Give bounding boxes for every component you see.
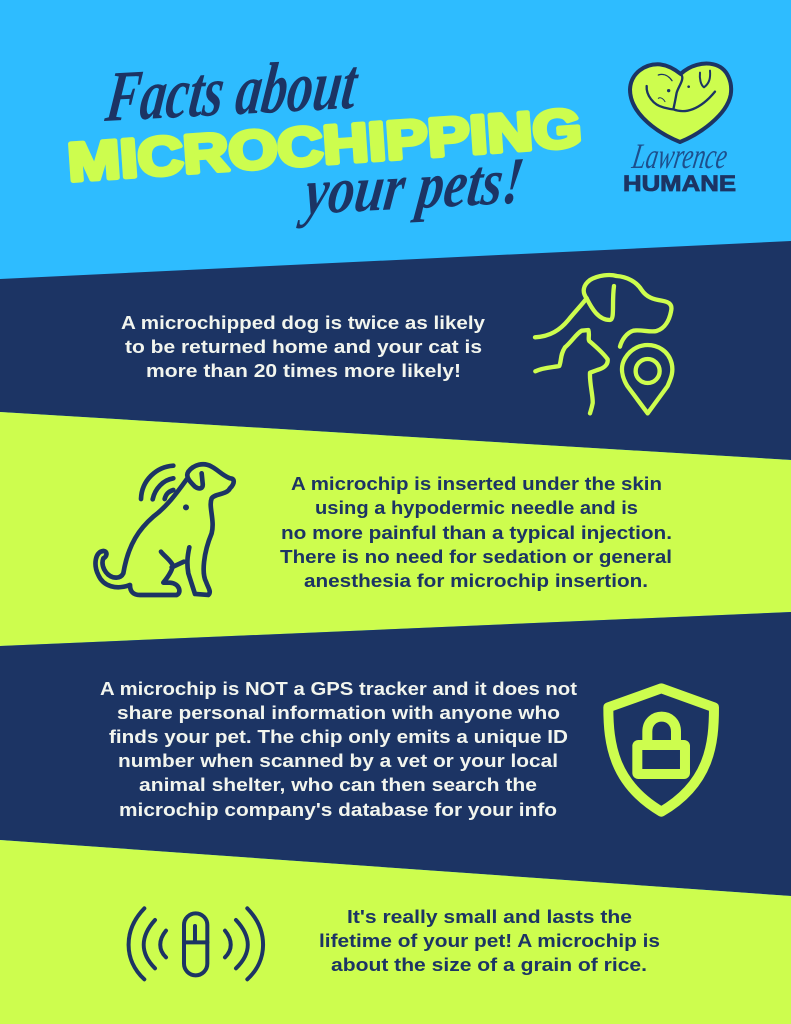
panel 3 text: not a GPS tracker: share personal information with anyone who bbox=[117, 702, 560, 723]
logo wordmark: HUMANE: HUMANE bbox=[623, 171, 736, 196]
panel 2 text: insertion: using a hypodermic needle and is bbox=[315, 497, 638, 518]
title line: your pets!: your pets! bbox=[296, 145, 528, 229]
panel 4 text: size and lifetime: about the size of a grain of rice. bbox=[331, 954, 647, 975]
panel 1 text: return rates: more than 20 times more likely! bbox=[146, 360, 461, 381]
panel 2 text: insertion: A microchip is inserted under the skin bbox=[291, 473, 662, 494]
panel 3 text: not a GPS tracker: microchip company's database for your info bbox=[119, 799, 557, 820]
dog ear bbox=[587, 286, 614, 320]
logo wordmark: Lawrence: Lawrence bbox=[629, 136, 731, 176]
panel 3 text: not a GPS tracker: A microchip is NOT a GPS tracker and it does not bbox=[100, 678, 577, 699]
panel 2 text: insertion: anesthesia for microchip insertion. bbox=[304, 570, 648, 591]
panel 1 text: return rates bbox=[121, 312, 486, 381]
chip dot bbox=[183, 504, 189, 510]
band 1: navy bbox=[0, 241, 791, 460]
dog chest, head and ear bbox=[187, 464, 234, 595]
band 2: lime bbox=[0, 412, 791, 646]
capsule bbox=[184, 913, 207, 975]
dog body and tail bbox=[96, 479, 187, 595]
panel 1 text: return rates: to be returned home and your cat is bbox=[125, 336, 482, 357]
icon: shield with padlock bbox=[608, 688, 714, 812]
panel 3 text: not a GPS tracker: animal shelter, who can then search the bbox=[139, 774, 537, 795]
panel 1 text: return rates: A microchipped dog is twice as likely bbox=[121, 312, 486, 333]
panel 4 text: size and lifetime: It's really small and lasts the bbox=[347, 906, 632, 927]
band 4: lime bbox=[0, 840, 791, 1024]
icon: microchip capsule with signal arcs bbox=[129, 908, 263, 979]
panel 3 text: not a GPS tracker bbox=[100, 678, 577, 820]
panel 2 text: insertion: no more painful than a typical injection. bbox=[281, 522, 672, 543]
title bbox=[66, 43, 584, 229]
signal waves bbox=[141, 466, 173, 499]
logo: Lawrence Humane bbox=[623, 64, 736, 196]
logo heart with cat and dog bbox=[630, 64, 731, 142]
panel 4 text: size and lifetime bbox=[319, 906, 660, 975]
pin centre bbox=[636, 359, 660, 383]
dog outline bbox=[535, 275, 671, 347]
panel 3 text: not a GPS tracker: finds your pet. The chip only emits a unique ID bbox=[109, 726, 568, 747]
icon: dog, cat and location pin bbox=[535, 275, 672, 413]
padlock body bbox=[637, 745, 685, 774]
title line: MICROCHIPPING: MICROCHIPPING bbox=[66, 98, 584, 193]
right arcs bbox=[225, 908, 263, 979]
shield bbox=[608, 688, 714, 812]
panel 3 text: not a GPS tracker: number when scanned by a vet or your local bbox=[118, 750, 558, 771]
padlock shackle bbox=[647, 717, 676, 745]
dog leg divider bbox=[172, 562, 184, 567]
left arcs bbox=[129, 908, 166, 979]
icon: sitting dog with chip signal bbox=[96, 464, 234, 595]
title line: Facts about: Facts about bbox=[101, 43, 363, 137]
location pin bbox=[622, 345, 672, 413]
cat outline bbox=[535, 330, 608, 413]
band 3: navy bbox=[0, 612, 791, 896]
panel 4 text: size and lifetime: lifetime of your pet! A microchip is bbox=[319, 930, 660, 951]
panel 2 text: insertion bbox=[280, 473, 672, 591]
panel 2 text: insertion: There is no need for sedation or general bbox=[280, 546, 672, 567]
